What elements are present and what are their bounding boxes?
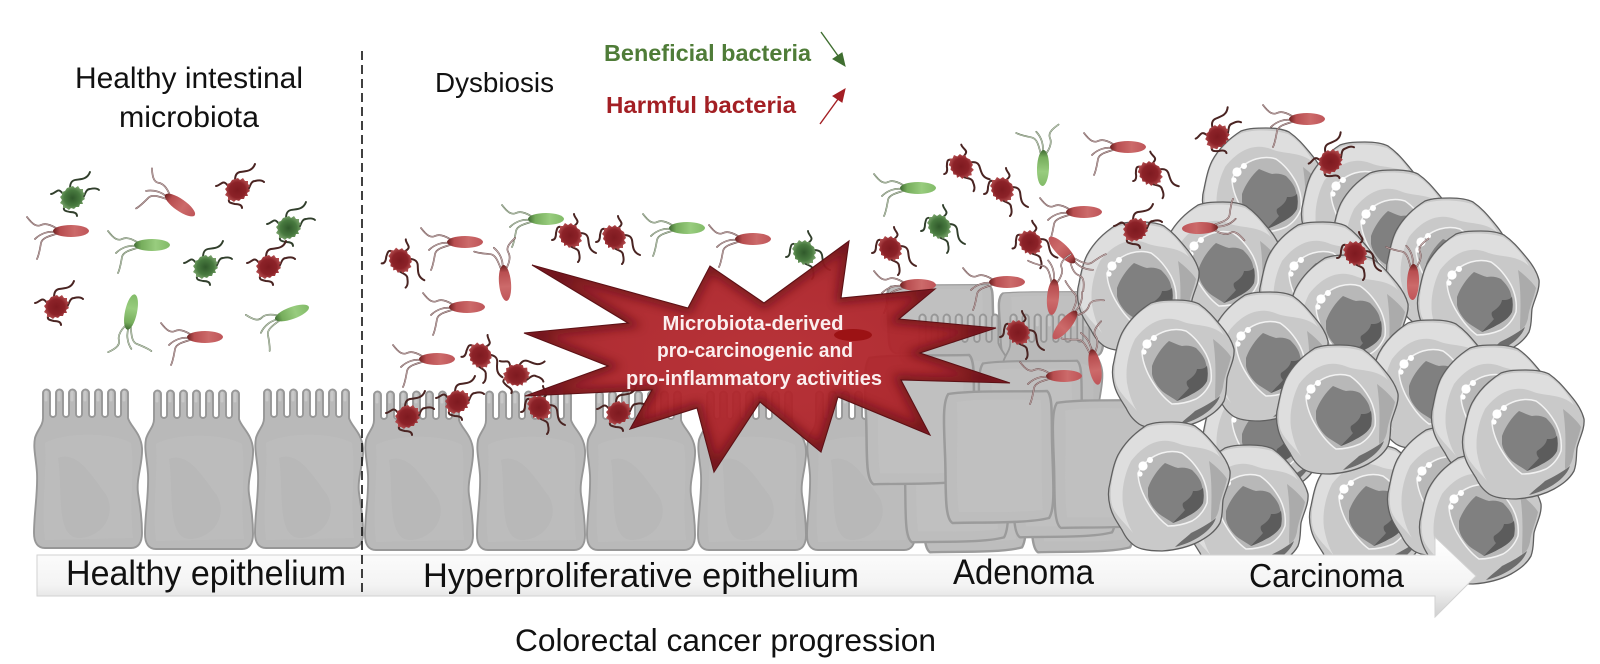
starburst text: Microbiota-derived xyxy=(662,313,844,335)
heading: dysbiosis: Dysbiosis xyxy=(435,67,554,98)
legend: harmful bacteria xyxy=(606,89,845,124)
healthy epithelium cells xyxy=(34,390,363,549)
carcinoma cancer cells xyxy=(1078,128,1584,584)
legend: beneficial bacteria xyxy=(604,32,845,66)
starburst text xyxy=(626,313,882,390)
bacteria: dysbiosis xyxy=(380,205,936,435)
heading: healthy intestinal microbiota: Healthy intestinal xyxy=(75,62,303,95)
bacteria: adenoma and carcinoma xyxy=(872,105,1429,404)
hyperproliferative epithelium cells xyxy=(365,392,915,550)
divider: dashed line xyxy=(361,51,363,597)
adenoma cells xyxy=(865,285,1157,552)
stage label: carcinoma: Carcinoma xyxy=(1249,557,1405,594)
heading: healthy intestinal microbiota: microbiota xyxy=(119,101,259,134)
arrow: harmful increase xyxy=(820,89,845,124)
heading: healthy intestinal microbiota xyxy=(75,62,303,134)
stage label: healthy epithelium: Healthy epithelium xyxy=(66,554,346,593)
starburst text: pro-inflammatory activities xyxy=(626,368,882,390)
starburst text: pro-carcinogenic and xyxy=(657,340,853,362)
arrow: colorectal cancer progression xyxy=(37,537,1476,617)
arrow: beneficial decrease xyxy=(821,32,845,66)
starburst: pro-carcinogenic activities xyxy=(524,241,1010,472)
axis caption: colorectal cancer progression: Colorectal cancer progression xyxy=(515,622,936,658)
bacteria: healthy microbiota xyxy=(27,164,318,365)
stage label: adenoma: Adenoma xyxy=(953,553,1095,592)
legend: harmful bacteria: Harmful bacteria xyxy=(606,92,797,118)
legend: beneficial bacteria: Beneficial bacteria xyxy=(604,40,811,66)
faded bacterium inside star xyxy=(834,329,872,341)
stage label: hyperproliferative epithelium: Hyperproliferative epithelium xyxy=(423,557,859,595)
